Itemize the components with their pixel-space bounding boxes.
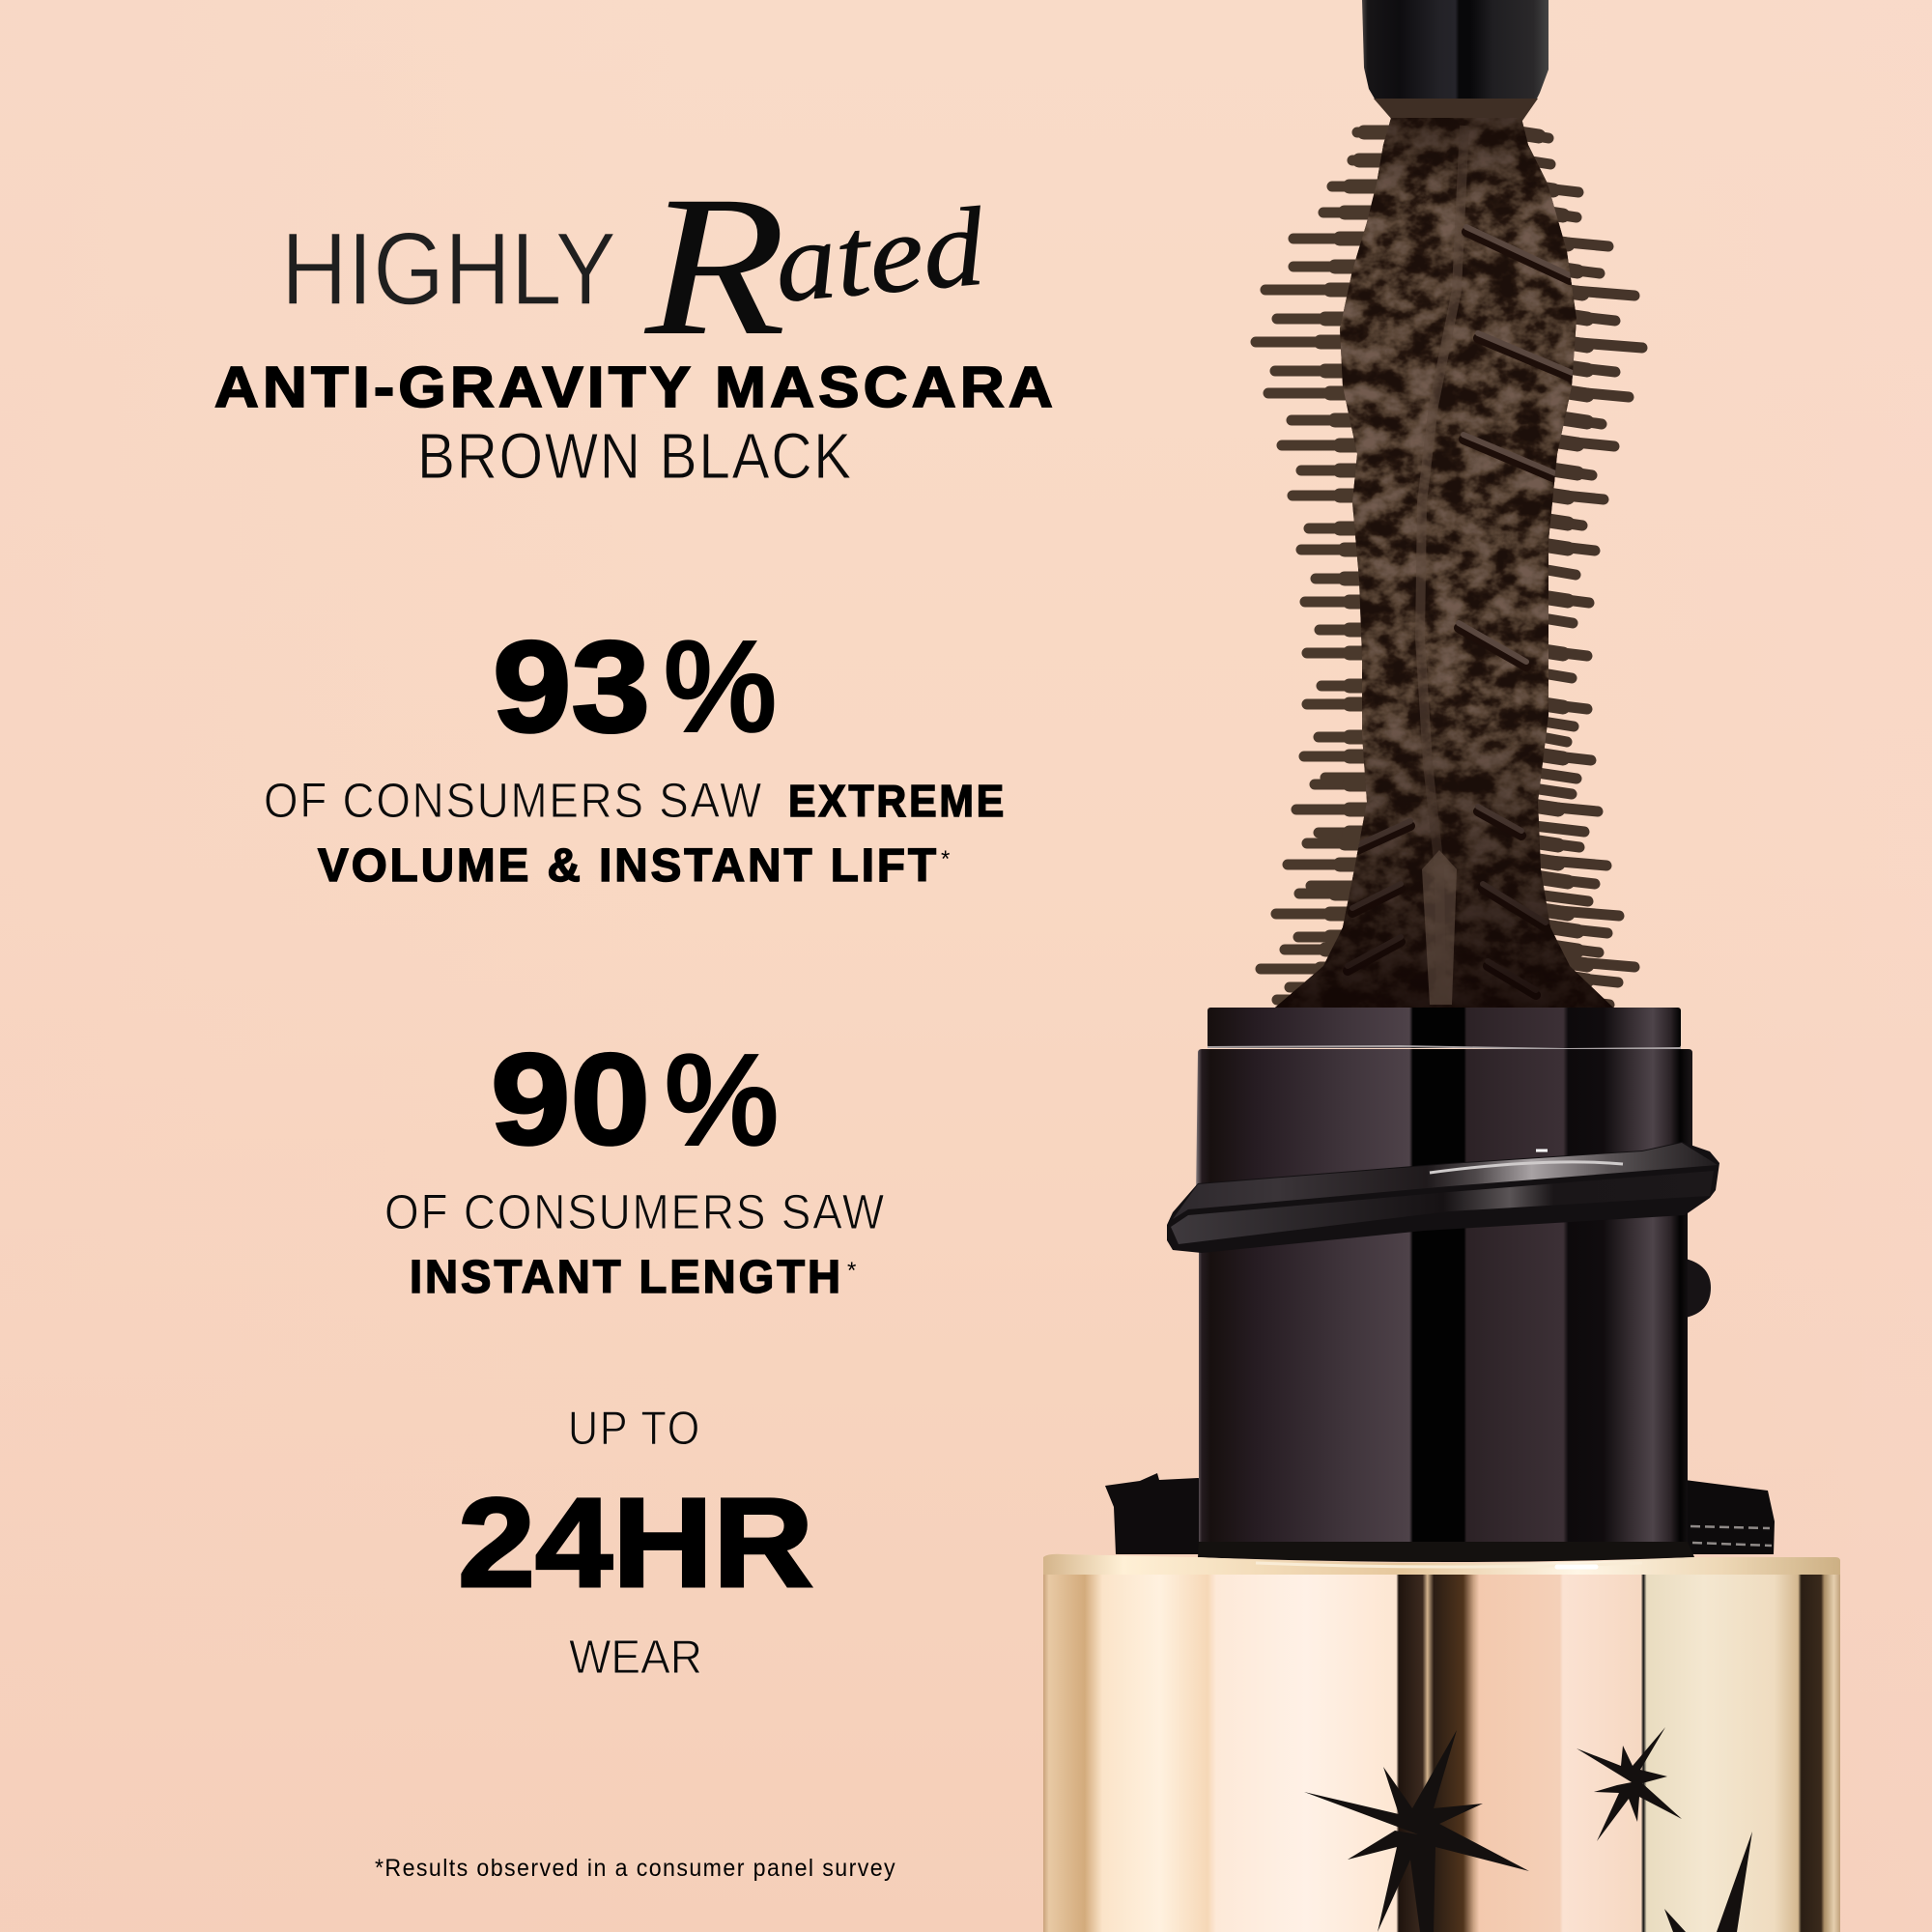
caption line 2: INSTANT LENGTH	[410, 1252, 843, 1303]
heading script word: Rated: ated	[770, 185, 990, 327]
heading: Highly Rated	[281, 155, 990, 377]
number 24HR: 24HR	[458, 1471, 813, 1613]
cap top collar	[1208, 1008, 1681, 1049]
product: gold tube	[1043, 1554, 1840, 1932]
swirl ring	[1167, 1142, 1719, 1253]
product: black cap	[1105, 1008, 1775, 1562]
cap base rim	[1198, 1542, 1694, 1562]
caption line 1: EXTREME	[788, 776, 1007, 826]
left bristles	[1256, 132, 1396, 1000]
core shading	[1275, 116, 1613, 1009]
cap upper cylinder	[1196, 1049, 1692, 1198]
caption line 2: VOLUME & INSTANT LIFT	[318, 840, 939, 892]
right black block	[1685, 1480, 1775, 1554]
number 93%: %	[664, 615, 777, 757]
caption line 1: OF CONSUMERS SAW	[264, 773, 763, 828]
heading script word: Rated	[643, 155, 990, 377]
star: medium	[1577, 1727, 1682, 1841]
panel: text column	[214, 155, 1057, 1882]
star: large	[1304, 1730, 1529, 1932]
stat: 24HR wear	[458, 1403, 813, 1684]
caption line 1: OF CONSUMERS SAW	[384, 1184, 886, 1239]
caption line 2: *	[941, 846, 950, 872]
number 93%: 93	[493, 615, 650, 759]
heading script word: Rated: R	[643, 155, 786, 377]
footnote: *Results observed in a consumer panel survey	[375, 1855, 896, 1882]
label: up to: UP TO	[568, 1403, 701, 1455]
product name: ANTI-GRAVITY MASCARA	[214, 355, 1057, 419]
right bristles	[1507, 131, 1642, 1005]
central ridge	[1420, 126, 1464, 1005]
heading word: HIGHLY: HIGHLY	[281, 211, 616, 327]
stat: 93%	[264, 615, 1007, 892]
number 90%	[491, 1028, 779, 1172]
wand neck	[1362, 0, 1548, 121]
product: mascara wand	[1256, 0, 1642, 1009]
angled bristle roots	[1348, 232, 1575, 995]
label: wear: WEAR	[569, 1632, 702, 1684]
cap lower cylinder	[1199, 1198, 1688, 1551]
tube rim	[1043, 1554, 1840, 1575]
left black block	[1105, 1473, 1232, 1554]
caption line 2: *	[847, 1258, 856, 1284]
tube body	[1043, 1571, 1840, 1932]
star: cropped	[1664, 1832, 1752, 1932]
number 90%: %	[665, 1029, 779, 1171]
stat: 90%	[384, 1028, 886, 1303]
number 93%	[493, 615, 777, 759]
brush core	[1275, 116, 1613, 1009]
number 90%: 90	[491, 1028, 650, 1172]
shade name: BROWN BLACK	[417, 420, 853, 493]
cap side nub	[1686, 1259, 1711, 1318]
brush bristles	[1256, 131, 1642, 1005]
